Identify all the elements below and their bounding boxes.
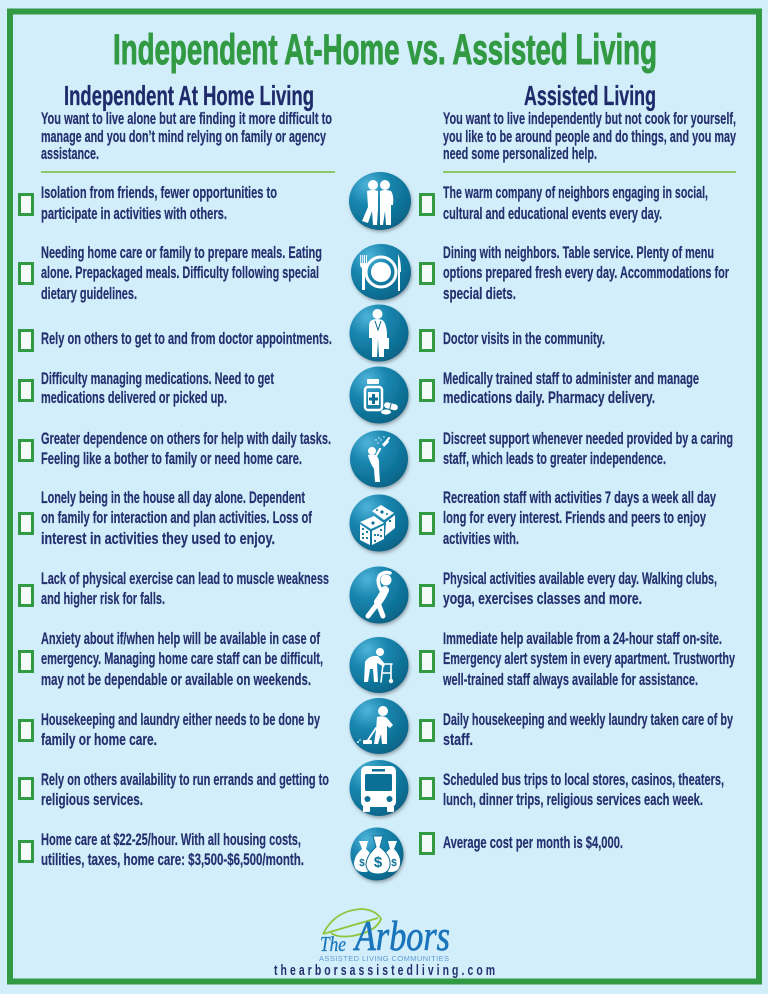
right text: Average cost per month is $4,000.	[443, 834, 623, 852]
checkbox	[420, 834, 434, 854]
left text	[41, 771, 329, 809]
right text	[443, 430, 733, 468]
icon: leaf	[323, 909, 381, 937]
checkbox	[420, 194, 434, 214]
icon: money bags: $	[374, 854, 383, 871]
icon: bus	[350, 760, 408, 816]
right text: special diets.	[443, 285, 516, 303]
checkbox	[20, 440, 32, 460]
checkbox	[420, 778, 434, 798]
left text: Lack of physical exercise can lead to muscle weakness	[41, 570, 329, 588]
intro text left: manage and you don’t mind relying on family or agency	[41, 128, 326, 146]
logo wordmark: The	[320, 932, 346, 956]
icon: pill bottle	[350, 366, 408, 424]
left text: dietary guidelines.	[41, 285, 137, 303]
left text: Home care at $22-25/hour. With all housing costs,	[41, 831, 301, 849]
left text: family or home care.	[41, 731, 157, 749]
right text	[443, 771, 724, 809]
left text	[41, 630, 323, 689]
left text: emergency. Managing home care staff can be difficult,	[41, 650, 323, 668]
right text: staff.	[443, 731, 473, 749]
left text: Rely on others to get to and from doctor appointments.	[41, 330, 332, 348]
panel: assisted living intro	[443, 80, 736, 163]
left text	[41, 831, 304, 869]
left text	[41, 430, 331, 468]
right text: medications daily. Pharmacy delivery.	[443, 389, 655, 407]
left text: Isolation from friends, fewer opportunities to	[41, 184, 277, 202]
row: social	[20, 172, 708, 230]
checkbox	[20, 778, 32, 798]
checkbox	[20, 586, 32, 606]
checkbox	[420, 330, 434, 350]
right text	[443, 244, 729, 303]
right text	[443, 489, 716, 548]
left text: may not be dependable or available on weekends.	[41, 671, 311, 689]
row: transportation	[20, 760, 724, 816]
checkbox	[20, 720, 32, 740]
right text	[443, 184, 708, 223]
checkbox	[420, 264, 434, 284]
left text	[41, 570, 329, 608]
icon: doctor	[350, 304, 408, 362]
left text	[41, 711, 320, 749]
right text	[443, 370, 699, 407]
left text: Greater dependence on others for help with daily tasks.	[41, 430, 331, 448]
row: cost	[20, 828, 623, 880]
left text: Housekeeping and laundry either needs to be done by	[41, 711, 320, 729]
intro text left	[41, 110, 332, 163]
right text: staff, which leads to greater independence.	[443, 450, 666, 468]
checkbox	[420, 720, 434, 740]
icon: dice	[350, 494, 408, 552]
checkbox	[420, 514, 434, 534]
checkbox	[20, 330, 32, 350]
logo wordmark	[320, 914, 450, 960]
logo wordmark: Arbors	[353, 914, 450, 960]
right text: Doctor visits in the community.	[443, 330, 605, 348]
row: housekeeping	[20, 698, 733, 754]
left text: interest in activities they used to enjoy.	[41, 530, 275, 548]
left text: and higher risk for falls.	[41, 590, 165, 608]
intro text left: You want to live alone but are finding it more difficult to	[41, 110, 332, 128]
icon: money bags: $	[391, 858, 397, 869]
left text: Feeling like a bother to family or need home care.	[41, 450, 302, 468]
icon: person showering	[350, 430, 408, 488]
intro text left: assistance.	[41, 145, 99, 163]
icon: plate and cutlery	[351, 244, 411, 300]
left text	[41, 489, 312, 548]
left text	[41, 244, 322, 303]
left text: Anxiety about if/when help will be available in case of	[41, 630, 320, 648]
row: medications	[20, 366, 699, 424]
row: emergency	[20, 630, 735, 693]
left text: Needing home care or family to prepare meals. Eating	[41, 244, 322, 262]
right text	[443, 711, 733, 749]
left text: on family for interaction and plan activities. Loss of	[41, 509, 312, 527]
checkbox	[20, 264, 32, 284]
left text: Difficulty managing medications. Need to get	[41, 370, 274, 388]
icon: person vacuuming	[350, 698, 408, 754]
right text	[442, 630, 735, 689]
left text	[41, 184, 277, 223]
left text: participate in activities with others.	[41, 205, 227, 223]
heading: assisted living: Assisted Living	[524, 80, 656, 111]
intro text right: need some personalized help.	[443, 145, 597, 163]
icon: money bags	[350, 828, 404, 880]
left text	[41, 370, 274, 407]
checkbox	[20, 652, 32, 672]
checkbox	[420, 586, 434, 606]
website url: thearborsassistedliving.com	[274, 962, 495, 978]
checkbox	[20, 194, 32, 214]
left text: religious services.	[41, 791, 143, 809]
left text: utilities, taxes, home care: $3,500-$6,500/month.	[41, 851, 304, 869]
intro text right	[443, 110, 736, 163]
right text: cultural and educational events every day.	[443, 205, 662, 223]
checkbox	[420, 440, 434, 460]
icon: person with walker	[350, 637, 408, 693]
left text: Rely on others availability to run errands and getting to	[41, 771, 329, 789]
row: recreation	[20, 489, 716, 552]
right text: activities with.	[443, 530, 519, 548]
left text: Lonely being in the house all day alone. Dependent	[41, 489, 305, 507]
checkbox	[420, 652, 434, 672]
icon: couple	[349, 172, 411, 230]
row: dining	[20, 244, 729, 303]
checkbox	[20, 842, 32, 862]
left text: alone. Prepackaged meals. Difficulty following special	[41, 264, 319, 282]
row: exercise	[20, 566, 717, 624]
checkbox	[420, 380, 434, 400]
row: doctor	[20, 304, 605, 362]
panel: independent living intro	[41, 80, 332, 163]
logo tagline: ASSISTED LIVING COMMUNITIES	[319, 954, 449, 963]
right text	[443, 570, 717, 608]
row: daily tasks	[20, 430, 733, 488]
right text: yoga, exercises classes and more.	[443, 590, 642, 608]
left text: medications delivered or picked up.	[41, 389, 227, 407]
checkbox	[20, 514, 32, 534]
checkbox	[20, 380, 32, 400]
icon: person stretching	[350, 566, 408, 624]
icon: money bags: $	[359, 858, 365, 869]
heading: independent at home living: Independent At Home Living	[64, 80, 314, 111]
logo: The Arbors	[319, 909, 450, 963]
